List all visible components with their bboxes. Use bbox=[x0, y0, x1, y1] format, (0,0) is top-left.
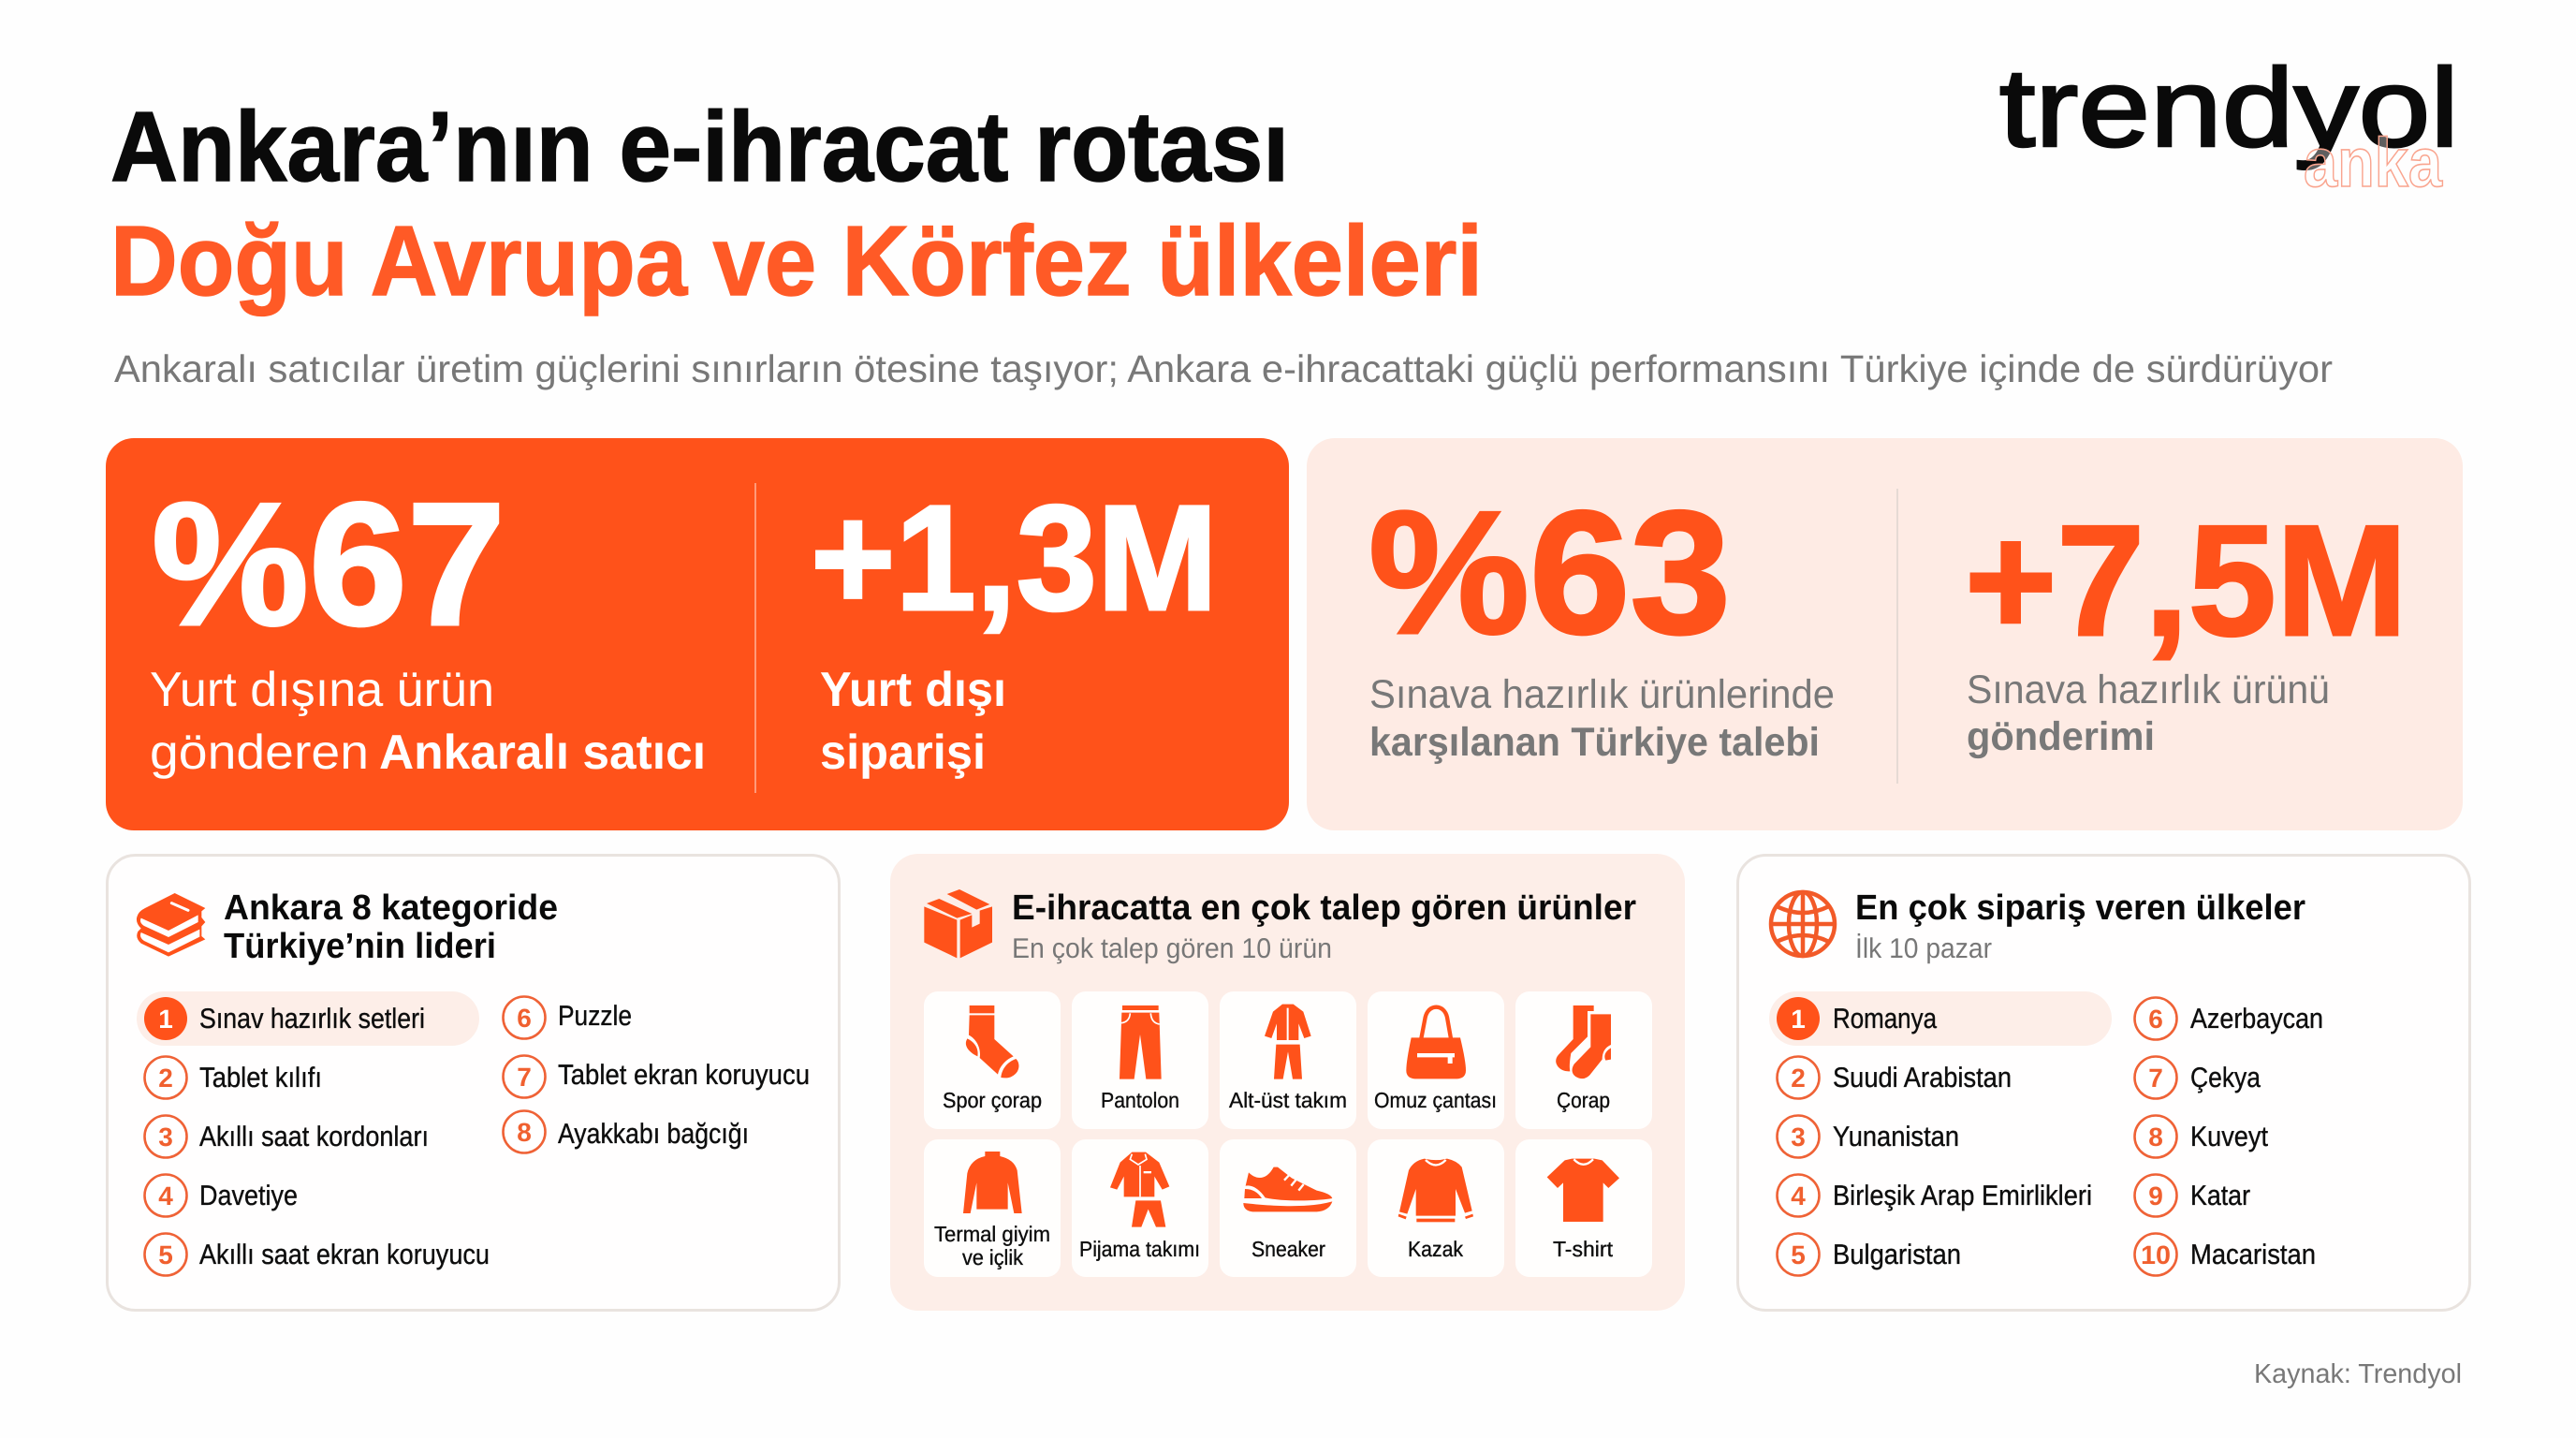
country 4: 4 bbox=[1791, 1181, 1806, 1211]
country 5: Bulgaristan bbox=[1833, 1240, 1961, 1270]
item 5: 5 bbox=[158, 1240, 173, 1269]
tile: Pantolon: Pantolon bbox=[1101, 1088, 1179, 1112]
tile: Sneaker: Sneaker bbox=[1251, 1237, 1325, 1261]
tile: Kazak bbox=[1368, 1139, 1504, 1277]
country 2: Suudi Arabistan bbox=[1833, 1063, 2012, 1093]
icon: stacked books bbox=[137, 893, 205, 957]
country 1: 1 bbox=[1791, 1005, 1806, 1034]
highlight pill bbox=[1769, 991, 2112, 1046]
item 4 bbox=[144, 1174, 298, 1217]
stat: 1.3M orders: siparişi bbox=[820, 726, 986, 780]
tile: Termal giyim ve içlik bbox=[924, 1139, 1061, 1277]
country 7: 7 bbox=[2148, 1064, 2163, 1093]
country 10: 10 bbox=[2141, 1240, 2171, 1269]
tile: Termal giyim ve içlik: ve içlik bbox=[962, 1245, 1023, 1269]
stat: 7.5M shipments bbox=[1965, 492, 2408, 759]
stat: 67 percent: gönderen bbox=[150, 726, 369, 780]
country 9: 9 bbox=[2148, 1181, 2163, 1211]
logo wordmark: trendyol bbox=[1999, 46, 2459, 170]
country 1: Romanya bbox=[1833, 1004, 1937, 1034]
logo: trendyol anka bbox=[1999, 46, 2459, 201]
title line 1: Ankara’nın e-ihracat rotası bbox=[110, 92, 1289, 202]
item 1: 1 bbox=[158, 1005, 173, 1034]
item 3: Akıllı saat kordonları bbox=[199, 1122, 429, 1152]
source note: Kaynak: Trendyol bbox=[2254, 1359, 2462, 1389]
heading: Türkiye’nin lideri bbox=[224, 927, 496, 966]
country 5: 5 bbox=[1791, 1240, 1806, 1269]
country 10 bbox=[2134, 1234, 2316, 1275]
subtitle: Ankaralı satıcılar üretim güçlerini sınırların ötesine taşıyor; Ankara e-ihracattaki güçlü performansını Türkiye içinde de sürdürüyor bbox=[114, 347, 2333, 390]
item 7 bbox=[504, 1056, 810, 1097]
panel: categories bbox=[107, 856, 839, 1311]
title bbox=[110, 92, 1483, 316]
stat: 63 percent: Sınava hazırlık ürünlerinde bbox=[1369, 672, 1835, 717]
stat: 1.3M orders bbox=[811, 474, 1218, 780]
item 3: 3 bbox=[158, 1123, 173, 1152]
item 7: Tablet ekran koruyucu bbox=[558, 1060, 810, 1091]
stat: 67 percent bbox=[150, 466, 706, 780]
subheading: En çok talep gören 10 ürün bbox=[1012, 933, 1332, 964]
tile: Spor çorap bbox=[924, 991, 1061, 1129]
item 8: Ayakkabı bağcığı bbox=[558, 1119, 749, 1150]
icon: box bbox=[924, 889, 992, 958]
country 3: Yunanistan bbox=[1833, 1122, 1959, 1152]
country 3: 3 bbox=[1791, 1123, 1806, 1152]
item 6 bbox=[504, 996, 632, 1039]
tile: Termal giyim ve içlik: Termal giyim bbox=[934, 1222, 1050, 1246]
country 5 bbox=[1777, 1234, 1961, 1275]
item 2: Tablet kılıfı bbox=[199, 1063, 322, 1093]
item 2: 2 bbox=[158, 1064, 173, 1093]
item 4: Davetiye bbox=[199, 1181, 298, 1211]
tile: Çorap: Çorap bbox=[1557, 1088, 1610, 1112]
item 2 bbox=[144, 1056, 322, 1099]
stat: 63 percent bbox=[1368, 475, 1835, 765]
country 6: Azerbaycan bbox=[2190, 1004, 2323, 1034]
item 6: Puzzle bbox=[558, 1001, 632, 1032]
panel: Ankara stats bbox=[106, 438, 1289, 830]
country 7: Çekya bbox=[2190, 1063, 2261, 1093]
country 4: Birleşik Arap Emirlikleri bbox=[1833, 1181, 2092, 1211]
country 7 bbox=[2134, 1056, 2261, 1099]
heading: En çok sipariş veren ülkeler bbox=[1855, 888, 2305, 928]
item 8: 8 bbox=[517, 1118, 532, 1147]
tile: T-shirt bbox=[1515, 1139, 1652, 1277]
item 8 bbox=[504, 1110, 749, 1153]
item 4: 4 bbox=[158, 1181, 173, 1211]
heading: E-ihracatta en çok talep gören ürünler bbox=[1012, 888, 1636, 928]
country 2: 2 bbox=[1791, 1064, 1806, 1093]
country 10: Macaristan bbox=[2190, 1240, 2316, 1270]
stat: 63 percent: karşılanan Türkiye talebi bbox=[1369, 720, 1820, 765]
stat: 7.5M shipments: Sınava hazırlık ürünü bbox=[1967, 668, 2330, 712]
tile: Omuz çantası bbox=[1368, 991, 1504, 1129]
item 5: Akıllı saat ekran koruyucu bbox=[199, 1240, 490, 1270]
tile: Spor çorap: Spor çorap bbox=[943, 1088, 1042, 1112]
item 7: 7 bbox=[517, 1063, 532, 1092]
country 9 bbox=[2134, 1174, 2250, 1217]
panel: products bbox=[890, 854, 1685, 1311]
tile: Alt-üst takım bbox=[1220, 991, 1356, 1129]
tile: Pijama takımı: Pijama takımı bbox=[1079, 1237, 1200, 1261]
stat: 1.3M orders: Yurt dışı bbox=[820, 663, 1006, 717]
panel: Türkiye stats bbox=[1307, 438, 2463, 830]
stat: 67 percent: Ankaralı satıcı bbox=[379, 726, 706, 780]
heading bbox=[224, 888, 558, 966]
tile: Çorap bbox=[1515, 991, 1652, 1129]
panel: countries bbox=[1737, 856, 2469, 1311]
country 8: 8 bbox=[2148, 1123, 2163, 1152]
heading: Ankara 8 kategoride bbox=[224, 888, 558, 928]
tile: Kazak: Kazak bbox=[1408, 1237, 1463, 1261]
country 4 bbox=[1777, 1174, 2092, 1217]
country 3 bbox=[1777, 1116, 1959, 1157]
country 6: 6 bbox=[2148, 1005, 2163, 1034]
stat: 67 percent: Yurt dışına ürün bbox=[150, 663, 494, 717]
tile: Omuz çantası: Omuz çantası bbox=[1374, 1088, 1497, 1112]
item 5 bbox=[144, 1234, 490, 1275]
tile: Pijama takımı bbox=[1072, 1139, 1208, 1277]
country 8: Kuveyt bbox=[2190, 1122, 2269, 1152]
stat: 7.5M shipments: gönderimi bbox=[1967, 714, 2155, 759]
stat: 67 percent: %67 bbox=[152, 466, 505, 662]
country 8 bbox=[2134, 1116, 2269, 1157]
item 1: Sınav hazırlık setleri bbox=[199, 1004, 425, 1034]
tile: Sneaker bbox=[1220, 1139, 1356, 1277]
title line 2: Doğu Avrupa ve Körfez ülkeleri bbox=[110, 206, 1483, 316]
stat: 63 percent: %63 bbox=[1368, 475, 1731, 670]
subheading: İlk 10 pazar bbox=[1855, 932, 1992, 964]
item 6: 6 bbox=[517, 1004, 532, 1033]
highlight pill bbox=[137, 991, 479, 1046]
item 1 bbox=[144, 997, 425, 1040]
country 1 bbox=[1777, 997, 1937, 1040]
tile: T-shirt: T-shirt bbox=[1553, 1237, 1614, 1261]
tile: Alt-üst takım: Alt-üst takım bbox=[1229, 1088, 1347, 1112]
stat: 7.5M shipments: +7,5M bbox=[1965, 492, 2408, 668]
item 3 bbox=[144, 1116, 429, 1157]
tile: Pantolon bbox=[1072, 991, 1208, 1129]
icon: globe bbox=[1771, 892, 1835, 956]
country 9: Katar bbox=[2190, 1181, 2250, 1211]
logo anka outline: anka bbox=[2304, 124, 2443, 201]
country 2 bbox=[1777, 1056, 2012, 1099]
country 6 bbox=[2134, 998, 2323, 1039]
stat: 1.3M orders: +1,3M bbox=[811, 474, 1218, 641]
